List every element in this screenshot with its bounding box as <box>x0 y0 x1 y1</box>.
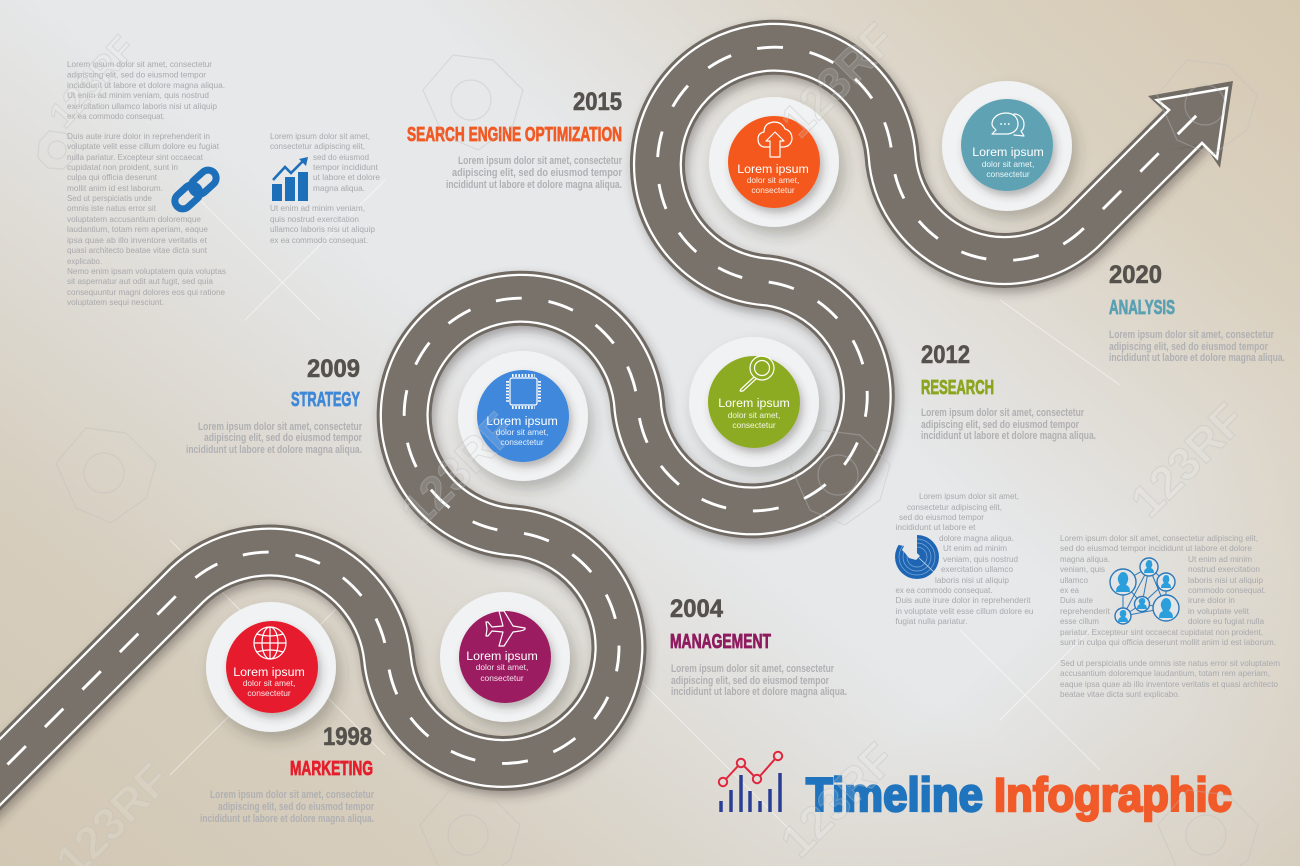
node: research 2012: Lorem ipsum <box>718 396 790 410</box>
node: marketing 1998: Lorem ipsum <box>233 665 305 679</box>
text block: network: beatae vitae dicta sunt explicabo. <box>1060 689 1180 699</box>
text block: top left: exercitation ullamco laboris nisi ut aliquip <box>67 101 217 111</box>
text block: top middle: ex ea commodo consequat. <box>270 235 368 245</box>
milestone: 2009 strategy: incididunt ut labore et dolore magna aliqua. <box>186 444 362 456</box>
milestone: 2004 management: Lorem ipsum dolor sit amet, consectetur <box>671 663 834 675</box>
node: research 2012 <box>689 337 819 467</box>
milestone: 2004 management: 2004 <box>670 595 723 623</box>
text block: top left: omnis iste natus error sit <box>67 203 157 213</box>
text block: network: sed do eiusmod tempor incididunt ut labore et dolore <box>1060 543 1252 553</box>
text block: network: accusantium doloremque laudantium, totam rem aperiam, <box>1060 668 1270 678</box>
text block: top middle: ut labore et dolore <box>313 172 380 182</box>
text: 123RF <box>390 403 525 537</box>
milestone: 2012 research: adipiscing elit, sed do eiusmod tempor <box>921 419 1079 431</box>
milestone: 2004 management: incididunt ut labore et dolore magna aliqua. <box>671 686 847 698</box>
text block: network: nostrud exercitation <box>1188 564 1260 574</box>
text block: radial chart <box>896 491 1034 626</box>
milestone: 1998 marketing: MARKETING <box>290 758 373 780</box>
text block: top middle: ullamco laboris nisi ut aliquip <box>270 224 375 234</box>
text block: network: sunt in culpa qui officia deserunt mollit anim id est laborum. <box>1060 637 1276 647</box>
text: 123RF <box>40 28 143 135</box>
icon: airplane <box>486 611 525 646</box>
icon: chain link <box>172 167 219 212</box>
text block: top left: nulla pariatur. Excepteur sint occaecat <box>67 152 204 162</box>
text block: top left: Duis aute irure dolor in reprehenderit in <box>67 131 210 141</box>
milestone: 2020 analysis: 2020 <box>1109 261 1162 289</box>
milestone: 2020 analysis <box>1109 261 1285 364</box>
text block: radial chart: consectetur adipiscing elit, <box>907 502 1002 512</box>
text block: top left: voluptatem accusantium doloremque <box>67 214 201 224</box>
text block: network: laboris nisi ut aliquip <box>1188 575 1263 585</box>
text block: radial chart: incididunt ut labore et <box>896 522 976 532</box>
milestone: 2009 strategy <box>186 355 362 456</box>
icon: chat bubbles <box>992 113 1024 136</box>
node: analysis 2020: consectetur <box>986 169 1030 179</box>
milestone: 2012 research: 2012 <box>921 341 970 369</box>
arrow head <box>1148 81 1233 169</box>
icon: globe <box>254 627 286 659</box>
text block: top left: incididunt ut labore et dolore magna aliqua. <box>67 80 225 90</box>
text block: network: veniam, quis <box>1060 564 1105 574</box>
text block: radial chart: Duis aute irure dolor in reprehenderit <box>896 595 1031 605</box>
text block: network: Duis aute <box>1060 595 1093 605</box>
text block: top middle: tempor incididunt <box>313 162 379 172</box>
node: management 2004: Lorem ipsum <box>466 649 538 663</box>
milestone: 2009 strategy: 2009 <box>307 355 360 383</box>
text block: network: Sed ut perspiciatis unde omnis iste natus error sit voluptatem <box>1060 658 1280 668</box>
text block: network: commodo consequat. <box>1188 585 1266 595</box>
milestone: 2015 search engine optimization: SEARCH ENGINE OPTIMIZATION <box>407 124 622 146</box>
text block: radial chart: sed do eiusmod tempor <box>899 512 984 522</box>
title <box>719 752 1232 821</box>
text block: network: pariatur. Excepteur sint occaecat cupidatat non proident, <box>1060 627 1263 637</box>
node: marketing 1998: consectetur <box>247 688 291 698</box>
node: strategy 2009: Lorem ipsum <box>486 414 558 428</box>
node: strategy 2009 <box>458 351 588 481</box>
icon: title chart <box>719 752 782 812</box>
text block: top middle <box>270 131 380 245</box>
text block: top left: cupidatat non proident, sunt in <box>67 162 178 172</box>
text block: network: eaque ipsa quae ab illo inventore veritatis et quasi architecto <box>1060 679 1278 689</box>
milestone: 1998 marketing: adipiscing elit, sed do eiusmod tempor <box>218 801 374 813</box>
text block: top middle: Ut enim ad minim veniam, <box>270 203 365 213</box>
node: management 2004: dolor sit amet, <box>476 662 528 672</box>
node: search engine optimization 2015: dolor sit amet, <box>747 175 799 185</box>
node: management 2004 <box>440 592 570 722</box>
text block: network: Ut enim ad minim <box>1188 554 1252 564</box>
milestone: 2015 search engine optimization: incididunt ut labore et dolore magna aliqua. <box>446 179 622 191</box>
text block: top left: explicabo. <box>67 256 102 266</box>
milestone: 2004 management: MANAGEMENT <box>670 631 771 653</box>
node: management 2004: consectetur <box>480 673 524 683</box>
milestone: 2020 analysis: ANALYSIS <box>1109 297 1175 319</box>
text block: top left: sit aspernatur aut odit aut fugit, sed quia <box>67 276 213 286</box>
milestone: 2009 strategy: STRATEGY <box>291 389 360 411</box>
text block: top left: quasi architecto beatae vitae dicta sunt <box>67 245 208 255</box>
node: marketing 1998: dolor sit amet, <box>243 678 295 688</box>
text block: radial chart: exercitation ullamco <box>941 564 1013 574</box>
node: analysis 2020: dolor sit amet, <box>982 159 1034 169</box>
node: research 2012: dolor sit amet, <box>728 410 780 420</box>
icon: radial chart <box>893 532 939 579</box>
text block: radial chart: in voluptate velit esse cillum dolore eu <box>896 606 1034 616</box>
text block: top middle: sed do eiusmod <box>313 152 369 162</box>
text block: network: esse cillum <box>1060 616 1099 626</box>
milestone: 2004 management: adipiscing elit, sed do eiusmod tempor <box>671 675 829 687</box>
node: research 2012: consectetur <box>732 420 776 430</box>
milestone: 2009 strategy: adipiscing elit, sed do eiusmod tempor <box>204 432 362 444</box>
milestone: 2012 research: RESEARCH <box>921 377 994 399</box>
icon: people network <box>1110 558 1179 624</box>
text block: network: ex ea <box>1060 585 1079 595</box>
milestone: 1998 marketing: 1998 <box>323 723 372 751</box>
node: strategy 2009: dolor sit amet, <box>496 427 548 437</box>
title: Timeline <box>806 768 983 821</box>
text block: top left: voluptatem sequi nesciunt. <box>67 297 164 307</box>
text block: top left: Sed ut perspiciatis unde <box>67 193 152 203</box>
text block: top left: voluptate velit esse cillum dolore eu fugiat <box>67 141 220 151</box>
node: marketing 1998 <box>206 602 336 732</box>
milestone: 2015 search engine optimization: 2015 <box>573 88 622 116</box>
node: analysis 2020 <box>942 81 1072 211</box>
milestone: 2009 strategy: Lorem ipsum dolor sit amet, consectetur <box>198 421 362 433</box>
text block: network <box>1060 533 1280 699</box>
text block: network: Lorem ipsum dolor sit amet, consectetur adipiscing elit, <box>1060 533 1258 543</box>
text block: top left: laudantium, totam rem aperiam, eaque <box>67 224 208 234</box>
text block: top left: ex ea commodo consequat. <box>67 111 165 121</box>
milestone: 1998 marketing: Lorem ipsum dolor sit amet, consectetur <box>210 789 374 801</box>
text: 123RF <box>770 733 905 866</box>
node: search engine optimization 2015 <box>709 97 839 227</box>
text block: radial chart: ex ea commodo consequat. <box>896 585 992 595</box>
node: analysis 2020: Lorem ipsum <box>972 145 1044 159</box>
icon: magnifier <box>740 356 774 391</box>
text block: top left <box>67 59 226 307</box>
text block: network: in voluptate velit <box>1188 606 1250 616</box>
text block: top left: adipiscing elit, sed do eiusmod tempor <box>67 70 206 80</box>
icon: cloud upload <box>758 122 792 157</box>
text block: top left: Lorem ipsum dolor sit amet, consectetur <box>67 59 212 69</box>
milestone: 2012 research <box>921 341 1096 442</box>
text: 123RF <box>770 13 905 147</box>
milestone: 2015 search engine optimization: adipiscing elit, sed do eiusmod tempor <box>452 167 622 179</box>
text block: radial chart: Lorem ipsum dolor sit amet, <box>919 491 1019 501</box>
text block: top left: mollit anim id est laborum. <box>67 183 163 193</box>
milestone: 2015 search engine optimization: Lorem ipsum dolor sit amet, consectetur <box>458 155 622 167</box>
milestone: 2012 research: Lorem ipsum dolor sit amet, consectetur <box>921 407 1084 419</box>
node: strategy 2009: consectetur <box>500 437 544 447</box>
text block: top left: Ut enim ad minim veniam, quis nostrud <box>67 90 209 100</box>
text block: top middle: Lorem ipsum dolor sit amet, <box>270 131 370 141</box>
text block: network: magna aliqua. <box>1060 554 1110 564</box>
milestone: 2012 research: incididunt ut labore et dolore magna aliqua. <box>921 430 1096 442</box>
milestone: 2015 search engine optimization <box>407 88 622 191</box>
text block: radial chart: dolore magna aliqua. <box>939 533 1014 543</box>
text block: network: reprehenderit <box>1060 606 1111 616</box>
text block: radial chart: fugiat nulla pariatur. <box>896 616 968 626</box>
text block: radial chart: veniam, quis nostrud <box>943 554 1018 564</box>
node: search engine optimization 2015: consectetur <box>751 185 795 195</box>
text block: top left: consequuntur magni dolores eos qui ratione <box>67 287 225 297</box>
text block: top middle: magna aliqua. <box>313 183 365 193</box>
text: 123RF <box>1120 393 1255 527</box>
text block: radial chart: Ut enim ad minim <box>943 543 1007 553</box>
text block: top middle: quis nostrud exercitation <box>270 214 359 224</box>
milestone: 2020 analysis: adipiscing elit, sed do eiusmod tempor <box>1109 341 1268 353</box>
node: search engine optimization 2015: Lorem ipsum <box>737 162 809 176</box>
icon: growth bars <box>272 157 308 201</box>
text block: network: dolore eu fugiat nulla <box>1188 616 1264 626</box>
milestone: 1998 marketing <box>200 723 374 825</box>
text block: top left: Nemo enim ipsam voluptatem quia voluptas <box>67 266 226 276</box>
icon: microchip <box>508 376 540 408</box>
text block: top left: ipsa quae ab illo inventore veritatis et <box>67 235 208 245</box>
milestone: 1998 marketing: incididunt ut labore et dolore magna aliqua. <box>200 813 374 825</box>
text block: radial chart: laboris nisi ut aliquip <box>935 575 1009 585</box>
text block: network: irure dolor in <box>1188 595 1235 605</box>
text block: top middle: consectetur adipiscing elit, <box>270 141 365 151</box>
text block: top left: culpa qui officia deserunt <box>67 172 158 182</box>
text block: network: ullamco <box>1060 575 1088 585</box>
title: Infographic <box>994 768 1232 821</box>
milestone: 2004 management <box>670 595 847 698</box>
